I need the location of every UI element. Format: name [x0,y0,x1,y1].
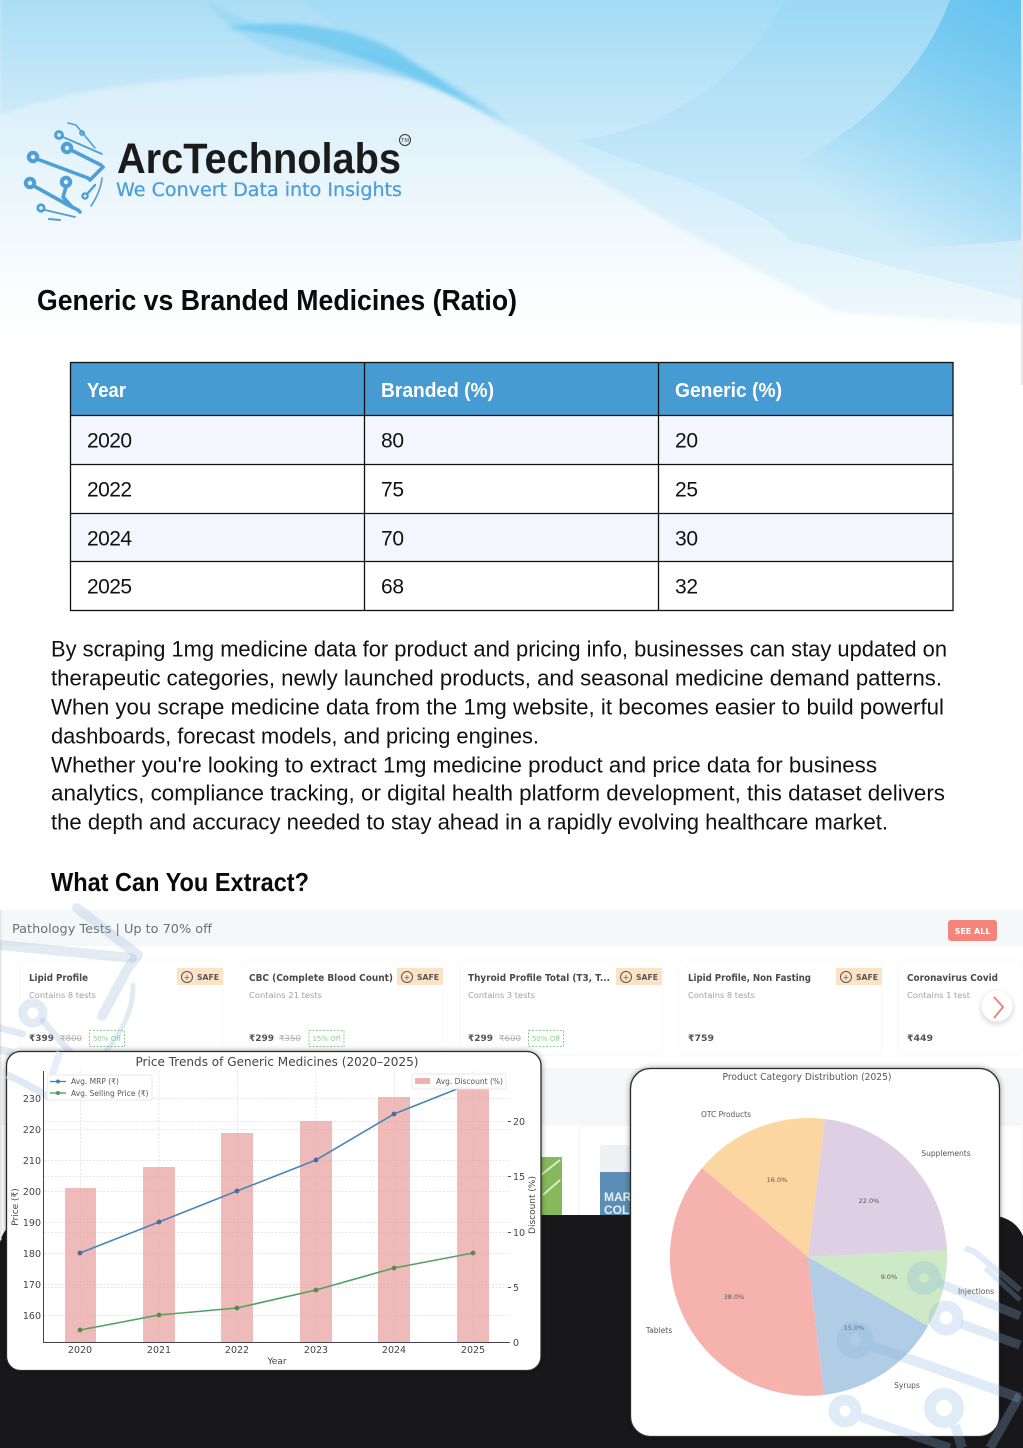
right axis labels: 20 [513,1117,525,1128]
dark footer of screenshot [0,1215,1023,1448]
test card: thyroid: SAFE [636,973,658,982]
left axis labels: 180 [23,1249,41,1260]
legend: lines: Avg. Selling Price (₹) [71,1089,149,1098]
table rows: 25 [675,478,698,502]
axis titles [11,1176,538,1367]
test card: cbc: ₹299 [249,1034,274,1044]
trademark mark [400,134,410,146]
test card: cbc: Contains 21 tests [249,991,322,1000]
axis titles: Year [266,1357,287,1367]
pie percentages: 16.0% [767,1176,787,1184]
test card: cbc: CBC (Complete Blood Count) [249,973,393,984]
test card: cbc: 15% Off [312,1035,341,1043]
body text: the depth and accuracy needed to stay ahead in a rapidly evolving healthcare market. [51,810,888,834]
icon: circuit globe [26,123,103,220]
left axis labels: 220 [23,1125,41,1136]
right axis labels: 10 [513,1228,525,1239]
discount bars [65,1088,489,1342]
table rows: 2022 [87,478,132,502]
product bottle: MAR [604,1190,632,1204]
table rows: 2025 [87,576,132,598]
body text: therapeutic categories, newly launched products, and seasonal medicine demand patterns. [51,666,942,690]
axis titles: Price (₹) [11,1188,21,1226]
heading: ratio: Generic vs Branded Medicines (Ratio) [37,285,517,317]
test card: coronavirus [898,960,1023,1055]
test card: coronavirus: ₹449 [907,1034,933,1044]
axis titles: Discount (%) [528,1176,538,1234]
left axis labels: 210 [23,1156,41,1167]
watermark: bottom right circuit [834,1248,1020,1448]
legend: lines [47,1075,152,1100]
test card: lipid non fasting: Lipid Profile, Non Fasting [688,973,811,984]
body text: dashboards, forecast models, and pricing engines. [51,724,539,748]
legend: bars: Avg. Discount (%) [436,1077,503,1086]
table rows: 80 [381,430,404,452]
header background [0,0,1023,385]
body text: analytics, compliance tracking, or digital health platform development, this dataset delivers [51,780,945,806]
pie percentages: 38.0% [724,1293,744,1301]
logo: ArcTechnolabs [26,123,411,220]
chart title: Product Category Distribution (2025) [722,1072,892,1083]
x axis labels: 2025 [461,1345,485,1356]
x axis labels: 2024 [382,1345,406,1356]
product cards strip [530,1125,1023,1225]
product bottle: COLL [604,1203,637,1217]
test card: thyroid: Thyroid Profile Total (T3, T... [468,973,610,984]
test card: coronavirus: Contains 1 test [907,991,970,1000]
pie percentages: 22.0% [859,1197,879,1205]
body text [51,636,947,834]
right axis labels: 15 [513,1172,525,1183]
see all button: SEE ALL [955,927,990,936]
test card: cbc: ₹350 [279,1034,301,1043]
right axis labels: 0 [513,1338,519,1349]
table rows: 75 [381,478,404,502]
test card: lipid profile: 50% Off [93,1035,121,1043]
table header [87,379,782,402]
table header: Generic (%) [675,379,782,402]
right axis labels [513,1117,525,1349]
test card: cbc: SAFE [417,973,439,982]
pie [670,1118,947,1396]
table rows: 70 [381,528,404,550]
table rows [87,430,698,598]
panel: category pie chart [630,1068,1000,1436]
test card: cbc [240,960,443,1055]
pie percentages: 9.0% [881,1273,897,1281]
test card: coronavirus: Coronavirus Covid [907,973,998,984]
test card: thyroid: + [623,973,629,982]
left axis labels: 230 [23,1094,41,1105]
test card: lipid non fasting: + [843,973,849,982]
pie percentages: 15.0% [844,1324,864,1332]
body text: By scraping 1mg medicine data for product and pricing info, businesses can stay updated on [51,636,947,662]
left axis labels: 190 [23,1218,41,1229]
test card: lipid profile: Lipid Profile [29,973,88,984]
trademark mark: TM [401,138,409,144]
table rows: 20 [675,430,698,452]
x axis labels: 2022 [225,1345,249,1356]
table header: Branded (%) [381,379,494,402]
body text: Whether you're looking to extract 1mg medicine product and price data for business [51,752,877,778]
pie labels [645,1110,994,1390]
right axis labels: 5 [513,1283,519,1294]
left axis labels [23,1094,41,1322]
test card: lipid profile: ₹399 [29,1034,54,1044]
heading: what can you extract: What Can You Extract? [51,867,309,897]
test card: lipid non fasting [679,960,882,1055]
x axis labels [68,1345,485,1356]
table rows: 32 [675,576,698,598]
test card: lipid profile: Contains 8 tests [29,991,96,1000]
test card: thyroid: Contains 3 tests [468,991,535,1000]
pie labels: Syrups [894,1381,920,1390]
x axis labels: 2020 [68,1345,92,1356]
test card: lipid non fasting: SAFE [856,973,878,982]
pie labels: Injections [958,1287,994,1296]
grid [44,1071,510,1342]
watermark: top left circuit [0,908,138,1055]
pie labels: Tablets [645,1326,672,1335]
x axis labels: 2023 [304,1345,328,1356]
test card: lipid profile: SAFE [197,973,219,982]
left axis labels: 200 [23,1187,41,1198]
pie labels: OTC Products [701,1110,751,1119]
line: avg MRP [78,1087,462,1255]
watermark inside chart [7,1075,50,1098]
product bottle [600,1145,637,1217]
table header: Year [87,379,126,402]
test card: thyroid: ₹600 [499,1034,521,1043]
panel: price trends chart [6,1052,541,1370]
test card: lipid profile [20,960,223,1055]
test card: thyroid: 50% Off [532,1035,560,1043]
test card: lipid non fasting: Contains 8 tests [688,991,755,1000]
test card: lipid profile: ₹800 [60,1034,82,1043]
test card: thyroid: ₹299 [468,1034,493,1044]
pie percentages [724,1176,897,1332]
legend: bars [412,1074,506,1089]
table: generic vs branded [70,362,953,610]
wordmark: ArcTechnolabs [117,135,401,183]
next arrow button [980,990,1014,1025]
left axis labels: 170 [23,1280,41,1291]
tagline: We Convert Data into Insights [116,180,402,201]
axes [44,1071,510,1342]
body text: When you scrape medicine data from the 1mg website, it becomes easier to build powerful [51,694,944,720]
line: avg selling price [78,1251,475,1332]
test card: lipid profile: + [184,973,190,982]
table rows: 68 [381,576,404,598]
see all button [948,920,997,941]
table rows: 2024 [87,528,132,550]
table rows: 2020 [87,430,132,452]
test card: lipid non fasting: ₹759 [688,1034,714,1044]
test card: thyroid [460,960,663,1055]
x axis labels: 2021 [147,1345,171,1356]
left axis labels: 160 [23,1311,41,1322]
pie labels: Supplements [921,1149,971,1158]
product box: green [530,1157,562,1217]
table rows: 30 [675,528,698,550]
website screenshot backdrop [0,910,1023,1448]
chart title: Price Trends of Generic Medicines (2020–2025) [136,1054,418,1069]
test card: cbc: + [404,973,410,982]
section title: Pathology Tests | Up to 70% off [12,921,212,936]
legend: lines: Avg. MRP (₹) [71,1077,119,1086]
